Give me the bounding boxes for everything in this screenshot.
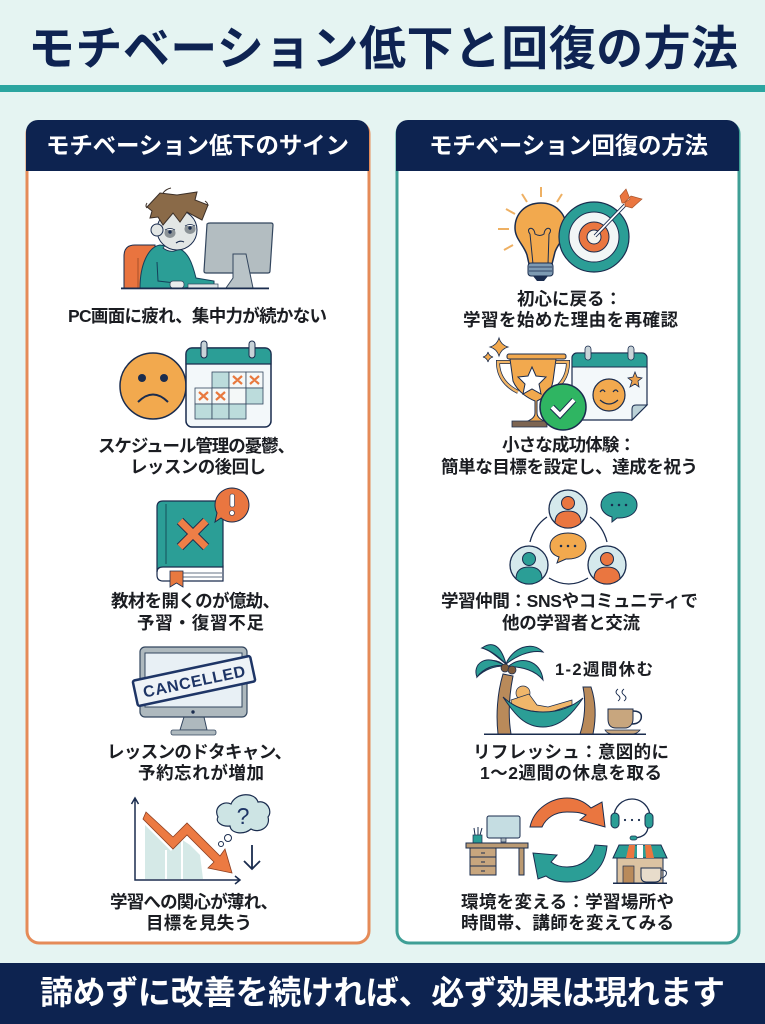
icon: monitor with cancelled stamp [133,647,255,735]
label: sign 5 [110,892,278,933]
icon: trophy, check and calendar [483,338,647,430]
label: method 3: 学習仲間：SNSやコミュニティで [441,591,698,611]
label: method 2: 簡単な目標を設定し、達成を祝う [441,457,698,477]
icon: light bulb and target [498,187,642,281]
icon: learning community [510,490,637,584]
heading: signs [26,120,369,171]
icon: change environment cycle [466,798,667,884]
label: sign 2: スケジュール管理の憂鬱、 [98,436,295,456]
label: method 3 [441,591,698,633]
label: sign 5: 目標を見失う [146,913,252,933]
icon: sad face and calendar [120,341,271,427]
footer banner [0,963,765,1024]
icon: tired person at computer [121,188,273,289]
label: method 5 [461,892,674,933]
icon: falling chart with question cloud: ? [237,803,249,829]
label: sign 5: 学習への関心が薄れ、 [110,892,278,912]
heading: recovery [396,120,739,171]
annotation: 1-2 weeks: 1-2週間休む [555,660,653,679]
label: method 2 [441,435,698,477]
title: モチベーション低下と回復の方法 [28,22,738,75]
label: sign 4: 予約忘れが増加 [138,763,264,783]
label: sign 1: PC画面に疲れ、集中力が続かない [68,306,327,326]
label: method 1: 学習を始めた理由を再確認 [463,310,678,330]
panel: signs of low motivation [26,120,369,943]
label: method 5: 環境を変える：学習場所や [461,892,674,912]
icon: falling chart with question cloud [132,795,270,884]
icon: palm tree, hammock and coffee [476,645,646,735]
label: method 1: 初心に戻る： [517,289,622,309]
footer banner: 諦めずに改善を続ければ、必ず効果は現れます [40,974,725,1011]
label: sign 3: 教材を開くのが億劫、 [111,591,280,611]
icon: monitor with cancelled stamp: CANCELLED [142,663,247,702]
label: method 1 [463,289,678,330]
label: method 4: リフレッシュ：意図的に [473,742,669,762]
label: sign 3 [111,591,280,633]
label: sign 4: レッスンのドタキャン、 [107,742,292,762]
icon: book with cross [157,488,249,587]
panel: recovery methods [396,120,739,943]
label: sign 2 [98,436,295,477]
label: method 3: 他の学習者と交流 [502,613,640,633]
heading: recovery: モチベーション回復の方法 [429,132,708,158]
label: sign 2: レッスンの後回し [130,457,266,477]
label: sign 4 [107,742,292,783]
label: method 4: 1〜2週間の休息を取る [480,763,662,783]
label: sign 3: 予習・復習不足 [137,613,264,633]
label: method 5: 時間帯、講師を変えてみる [461,913,674,933]
heading: signs: モチベーション低下のサイン [46,132,349,158]
label: method 4 [473,742,669,783]
label: method 2: 小さな成功体験： [502,435,636,455]
